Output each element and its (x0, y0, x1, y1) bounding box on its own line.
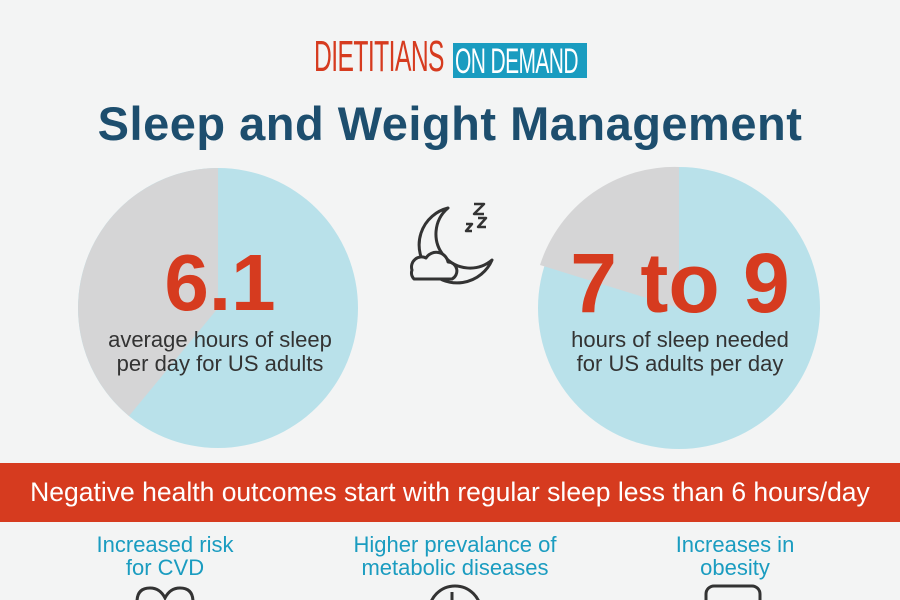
stat: 6.1: 6.1 (164, 238, 276, 327)
outcome: metabolic: Higher prevalance of (353, 532, 556, 557)
outcome: metabolic (353, 532, 557, 580)
stat: 7 to 9: hours of sleep needed (571, 327, 789, 352)
outcome: obesity (676, 532, 794, 580)
outcome: CVD: for CVD (126, 555, 204, 580)
outcome: CVD: Increased risk (97, 532, 233, 557)
stat: 6.1: average hours of sleep (108, 327, 332, 352)
stat: 7 to 9: 7 to 9 (570, 236, 790, 330)
banner: Negative health outcomes start with regular sleep less than 6 hours/day (30, 477, 870, 507)
logo (314, 32, 587, 80)
logo: ON DEMAND (455, 42, 578, 80)
icons bottom (136, 584, 762, 600)
stat: 6.1: per day for US adults (117, 351, 323, 376)
stat: 7 to 9 (570, 236, 790, 376)
title: Sleep and Weight Management (98, 97, 802, 150)
outcome: obesity: obesity (700, 555, 770, 580)
banner (0, 463, 900, 522)
stat: 7 to 9: for US adults per day (577, 351, 783, 376)
logo: DIETITIANS (314, 32, 444, 80)
pie: left 6.1 (78, 168, 358, 448)
pie charts (78, 167, 820, 449)
pie: right 7 to 9 (538, 167, 820, 449)
outcome: CVD (97, 532, 234, 580)
outcome: obesity: Increases in (676, 532, 794, 557)
icon: moon and cloud (412, 204, 492, 283)
outcome: metabolic: metabolic diseases (361, 555, 549, 580)
stat: 6.1 (108, 238, 332, 376)
